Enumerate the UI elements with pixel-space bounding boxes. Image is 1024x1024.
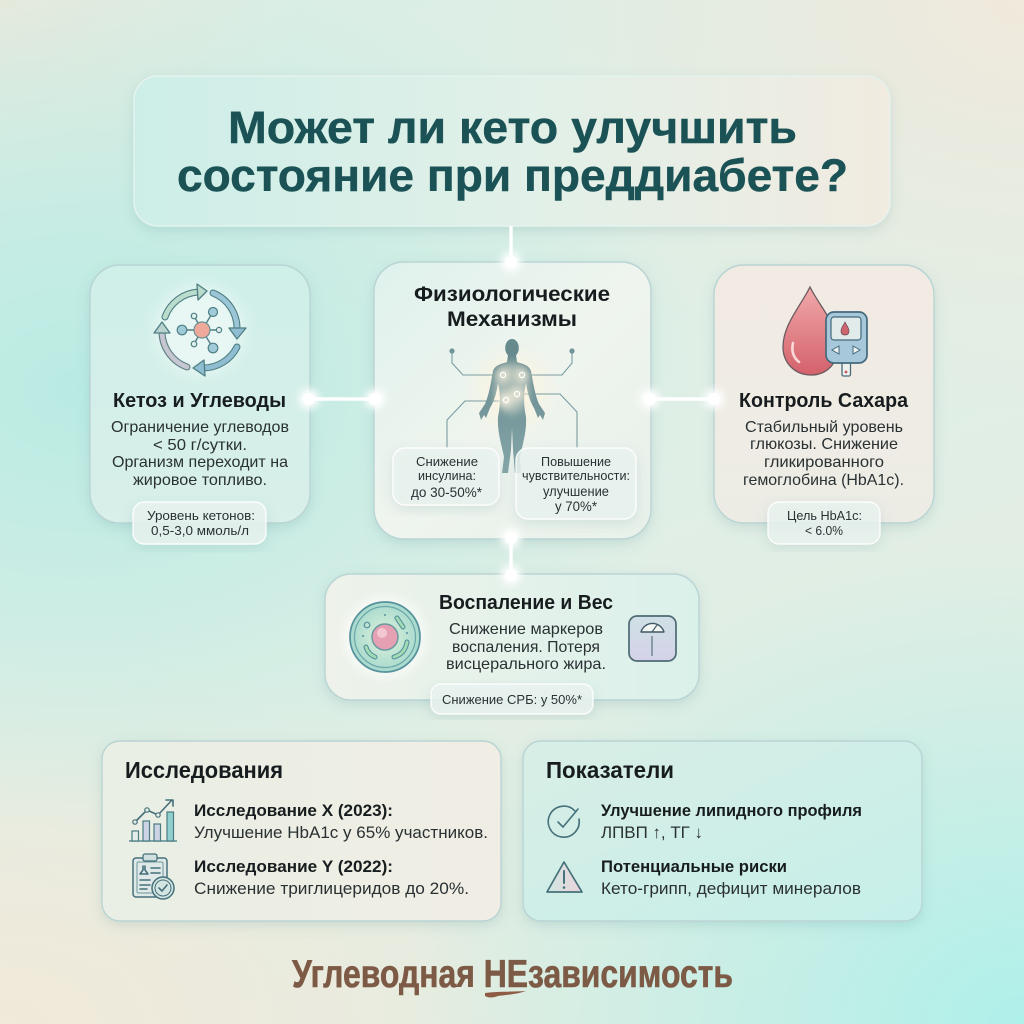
body text: висцерального жира. <box>446 656 606 673</box>
body text: жировое топливо. <box>133 472 267 489</box>
callout: sensitivity increase <box>516 448 636 519</box>
callout: insulin reduction: Снижение <box>416 454 478 469</box>
body text: воспаления. Потеря <box>452 639 600 656</box>
body text: Снижение маркеров <box>449 621 603 638</box>
heading: Физиологические <box>414 283 610 306</box>
callout: ketone level: Уровень кетонов: <box>147 508 255 523</box>
callout: insulin reduction: до 30-50%* <box>411 484 483 500</box>
study X text <box>194 801 488 842</box>
study X text: Исследование X (2023): <box>194 801 393 820</box>
lipid profile text: Улучшение липидного профиля <box>601 801 862 820</box>
panel: physiological mechanisms <box>374 262 651 539</box>
risks text: Кето-грипп, дефицит минералов <box>601 879 861 898</box>
study Y text: Исследование Y (2022): <box>194 857 393 876</box>
icon: growth chart <box>129 800 177 841</box>
callout: HbA1c target: Цель HbA1c: <box>787 508 862 523</box>
callout: sensitivity increase: Повышение <box>541 454 611 469</box>
panel: ketosis and carbohydrates <box>90 265 310 544</box>
icon: bathroom scale <box>629 616 676 661</box>
callout: HbA1c target <box>768 502 880 544</box>
heading: Кетоз и Углеводы <box>113 390 286 412</box>
body text: Организм переходит на <box>112 454 288 471</box>
body text <box>743 419 904 489</box>
callout: ketone level <box>133 502 266 544</box>
heading: Исследования <box>125 757 283 783</box>
icon: check circle <box>548 806 579 837</box>
callout: sensitivity increase: улучшение <box>543 484 609 499</box>
panel: inflammation and weight <box>325 574 699 714</box>
callout: CRP reduction <box>431 684 593 714</box>
footer brand: Углеводная НЕзависимость <box>292 953 733 996</box>
risks text <box>601 857 861 898</box>
icon: clipboard with check <box>133 854 174 899</box>
title text: состояние при преддиабете? <box>177 150 848 201</box>
brush underline <box>485 991 526 998</box>
body text: гликированного <box>764 454 884 471</box>
icon: metabolic cycle <box>154 284 246 376</box>
callout: HbA1c target: < 6.0% <box>805 523 843 538</box>
lipid profile text: ЛПВП ↑, ТГ ↓ <box>601 823 703 842</box>
body text: гемоглобина (HbA1c). <box>743 472 904 489</box>
heading: Показатели <box>546 757 674 783</box>
icon: cell <box>343 595 427 679</box>
diagram: human body with organ markers <box>447 339 577 473</box>
body text <box>111 419 289 489</box>
icon: warning triangle <box>547 862 582 892</box>
body text <box>446 621 606 673</box>
panel: indicators <box>523 741 922 921</box>
panel: research <box>102 741 501 921</box>
body text: Ограничение углеводов <box>111 419 289 436</box>
title text: Может ли кето улучшить <box>228 102 797 153</box>
panel: blood sugar control <box>714 265 934 544</box>
callout: sensitivity increase: чувствительности: <box>522 469 630 483</box>
connector: mechanisms to sugar control <box>640 389 724 409</box>
connector: ketosis to mechanisms <box>299 389 385 409</box>
lipid profile text <box>601 801 862 842</box>
body text: < 50 г/сутки. <box>153 437 247 454</box>
heading: Воспаление и Вес <box>439 592 613 614</box>
callout: ketone level: 0,5-3,0 ммоль/л <box>151 523 249 538</box>
risks text: Потенциальные риски <box>601 857 787 876</box>
heading: Контроль Сахара <box>739 390 909 412</box>
connector: mechanisms to inflammation <box>501 528 521 585</box>
study X text: Улучшение HbA1c у 65% участников. <box>194 823 488 842</box>
callout: insulin reduction: инсулина: <box>418 468 476 483</box>
callout: insulin reduction <box>393 448 499 505</box>
connector: title to mechanisms <box>501 226 521 272</box>
body text: Стабильный уровень <box>745 419 903 436</box>
title text <box>177 102 848 201</box>
heading <box>414 283 610 331</box>
callout: CRP reduction: Снижение СРБ: у 50%* <box>442 692 582 707</box>
study Y text <box>194 857 469 898</box>
study Y text: Снижение триглицеридов до 20%. <box>194 879 469 898</box>
heading: Механизмы <box>447 308 577 331</box>
callout: sensitivity increase: у 70%* <box>555 499 598 514</box>
icon: blood drop and glucometer <box>783 287 867 376</box>
title panel <box>134 76 890 226</box>
body text: глюкозы. Снижение <box>750 436 898 453</box>
